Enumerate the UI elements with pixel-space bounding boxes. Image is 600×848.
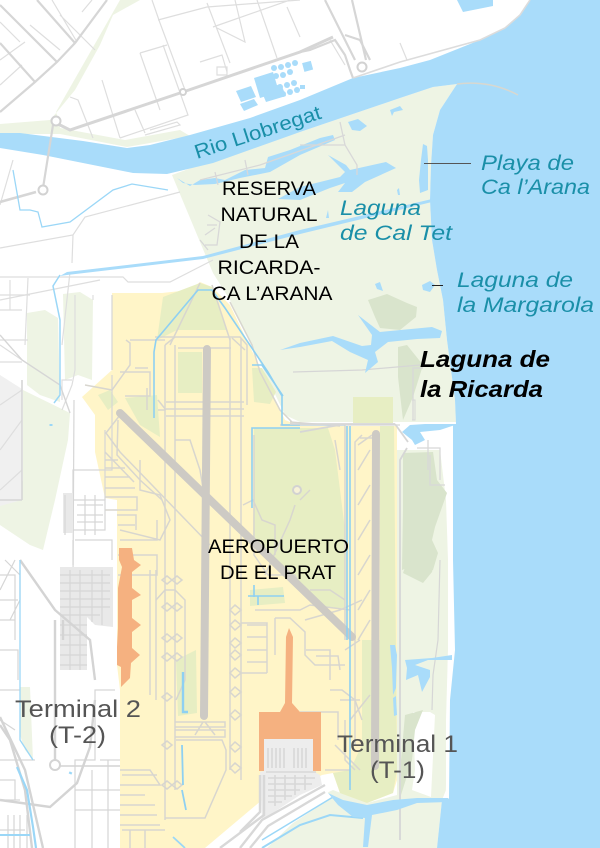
roads: motorway junction southwest — [0, 560, 120, 848]
label: Terminal 2: Terminal 2 — [15, 696, 141, 723]
wetland roads and fences — [200, 122, 445, 485]
label: Laguna de la Margarola — [457, 269, 594, 317]
plant: water treatment basins — [236, 60, 313, 111]
panel: white beach patches — [262, 424, 453, 848]
lagoon: Ricarda north wetlands — [177, 106, 458, 847]
label: Laguna de la Ricarda: la Ricarda — [420, 376, 543, 402]
label: Aeropuerto de El Prat — [208, 536, 349, 584]
taxiway network — [85, 283, 372, 848]
label: Playa de Ca l'Arana: Ca l’Arana — [481, 176, 590, 199]
label: Rio Llobregat: Rio Llobregat — [192, 102, 325, 164]
panel: green park areas — [0, 0, 457, 848]
label: Reserva Natural de la Ricarda-Ca l'Arana: RESERVA — [222, 178, 316, 200]
leader line: Laguna de la Margarola — [432, 284, 443, 286]
lagoon: Cal Tet channel — [60, 199, 432, 276]
label: Laguna de la Ricarda: Laguna de — [420, 346, 550, 372]
label: Terminal 1: Terminal 1 — [337, 731, 458, 758]
leader line: Playa de Ca l'Arana — [424, 162, 471, 164]
terminal 1 and terminal 2 buildings — [117, 548, 321, 771]
panel: airfield grass — [98, 283, 397, 803]
panel: yellow-green reserve block — [353, 397, 393, 423]
label: Playa de Ca l'Arana — [481, 152, 590, 199]
label: Aeropuerto de El Prat: AEROPUERTO — [208, 536, 349, 558]
roads: northern city grid — [0, 0, 407, 490]
label: Playa de Ca l'Arana: Playa de — [481, 152, 574, 175]
runways — [120, 349, 376, 766]
panel: forest patches — [368, 294, 447, 795]
panel: grey urban block — [0, 375, 22, 506]
building: Terminal 2 — [117, 548, 141, 687]
label: Terminal 2: (T-2) — [49, 722, 106, 749]
airport drainage channels — [154, 290, 350, 810]
label: Aeropuerto de El Prat: DE EL PRAT — [220, 562, 336, 584]
icon: roundabouts — [38, 62, 366, 494]
label: Reserva Natural de la Ricarda-Ca l'Arana: NATURAL — [220, 204, 318, 226]
label: Terminal 1: (T-1) — [370, 757, 425, 784]
label: Reserva Natural de la Ricarda-Ca l'Arana: RICARDA- — [218, 257, 320, 279]
label: Reserva Natural de la Ricarda-Ca l'Arana: DE LA — [239, 231, 299, 253]
runway: north-south west — [204, 349, 207, 716]
label: Laguna de Cal Tet — [340, 197, 453, 245]
runway: north-south east — [375, 434, 376, 766]
label: Reserva Natural de la Ricarda-Ca l'Arana: CA L’ARANA — [212, 283, 332, 305]
roads: Terminal 2 parking — [0, 493, 120, 848]
label: Terminal 2 — [15, 696, 141, 749]
label: Laguna de la Ricarda — [420, 346, 550, 402]
panel: airport grounds — [82, 282, 397, 848]
label: Laguna de la Margarola: la Margarola — [457, 294, 594, 317]
lagoon: Ca l'Arana — [419, 144, 428, 193]
building: Terminal 1 — [259, 628, 321, 771]
terminal 1 parking and roads — [220, 739, 325, 848]
label: Laguna de Cal Tet: de Cal Tet — [340, 222, 453, 245]
label: Reserva Natural de la Ricarda-Ca l'Arana — [212, 178, 332, 305]
label: Laguna de Cal Tet: Laguna — [340, 197, 421, 220]
label: Terminal 1 — [337, 731, 458, 784]
breakwater — [457, 83, 518, 95]
label: Laguna de la Margarola: Laguna de — [457, 269, 573, 292]
runway: diagonal — [120, 413, 352, 637]
blue water channels, southwest — [0, 170, 363, 848]
